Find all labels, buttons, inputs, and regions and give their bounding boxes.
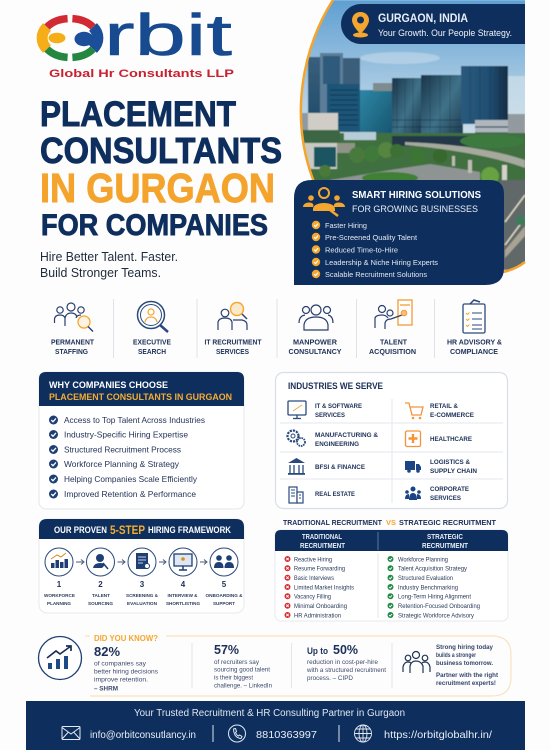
- step labels: SCREENING &: [126, 593, 159, 599]
- comparison heading: [283, 518, 496, 527]
- logo mark: [42, 19, 98, 57]
- tagline: Hire Better Talent. Faster.: [40, 249, 178, 264]
- industry: IT and software: [288, 401, 362, 419]
- service: talent acquisition: TALENT: [380, 340, 408, 346]
- step numbers: 5: [222, 580, 227, 589]
- strategic column: Talent Acquisition Strategy: [398, 566, 468, 573]
- table header: RECRUITMENT: [422, 543, 469, 550]
- panel header: [39, 372, 244, 406]
- footer email: [62, 726, 196, 741]
- industry: healthcare: HEALTHCARE: [430, 436, 472, 443]
- strategic column: Strategic Workforce Advisory: [398, 612, 475, 619]
- stat: up to 50 percent: with a structured recruitment: [306, 668, 386, 674]
- stat: 82 percent: of companies say: [94, 662, 146, 668]
- partner message: Strong hiring today: [436, 645, 494, 651]
- panel: why companies choose: [39, 372, 244, 509]
- step labels: PLANNING: [47, 601, 71, 607]
- stat: up to 50 percent: Up to: [307, 646, 328, 656]
- traditional column: Basic Interviews: [294, 575, 334, 582]
- logo: [42, 3, 234, 80]
- footer website: https://orbitglobalhr.in/: [384, 729, 492, 741]
- service: executive search: EXECUTIVE: [133, 340, 171, 346]
- industry: logistics: LOGISTICS &: [430, 459, 470, 466]
- framework header: HIRING FRAMEWORK: [148, 525, 231, 535]
- panel: smart hiring solutions: [294, 180, 504, 285]
- step labels: ONBOARDING &: [206, 593, 243, 599]
- icon: growth chart: [38, 636, 82, 680]
- reasons list: Workforce Planning & Strategy: [64, 459, 180, 469]
- table header: STRATEGIC: [427, 534, 463, 541]
- comparison heading: VS: [386, 518, 396, 527]
- step labels: [44, 593, 243, 607]
- partner message: recruitment experts!: [436, 681, 496, 687]
- traditional column: Resume Forwarding: [294, 566, 346, 573]
- stat: 82 percent: 82%: [94, 644, 120, 659]
- stat: 57 percent: of recruiters say: [214, 660, 259, 666]
- stat: 82 percent: – SHRM: [94, 686, 118, 692]
- industry: logistics: [405, 459, 477, 475]
- footer tagline: Your Trusted Recruitment & HR Consulting Partner in Gurgaon: [134, 708, 405, 719]
- service: IT recruitment services: IT RECRUITMENT: [204, 340, 262, 346]
- stat: 57 percent: sourcing good talent: [214, 668, 270, 674]
- icon: people: [403, 652, 430, 673]
- location slogan: Your Growth. Our People Strategy.: [378, 28, 512, 39]
- comparison heading: TRADITIONAL RECRUITMENT: [283, 518, 382, 527]
- service: permanent staffing: [51, 303, 95, 356]
- step numbers: [57, 580, 227, 589]
- service: manpower consultancy: MANPOWER: [293, 340, 337, 346]
- framework header: [39, 519, 244, 539]
- traditional column: HR Administration: [294, 612, 342, 619]
- stat: 57 percent: 57%: [214, 642, 239, 657]
- traditional column: Minimal Onboarding: [294, 603, 348, 610]
- partner message: [436, 645, 498, 687]
- comparison table: [275, 530, 508, 621]
- step icon: onboarding: [214, 555, 234, 568]
- panel subheading: FOR GROWING BUSINESSES: [352, 204, 478, 215]
- strategic column: Workforce Planning: [398, 556, 449, 563]
- industry: retail: RETAIL &: [430, 403, 458, 410]
- footer phone: 8810363997: [256, 729, 317, 741]
- step numbers: 4: [181, 580, 186, 589]
- industry: retail: [405, 403, 474, 419]
- panel: 5-step hiring framework: [39, 519, 244, 613]
- did you know strip: [38, 634, 511, 696]
- step labels: TALENT: [92, 593, 110, 599]
- service: IT recruitment services: SERVICES: [216, 349, 249, 356]
- partner message: Partner with the right: [436, 673, 498, 679]
- icon: team with magnifier: [303, 188, 345, 216]
- strategic column: [388, 556, 481, 619]
- benefits list: Leadership & Niche Hiring Experts: [325, 258, 438, 267]
- footer website: [354, 725, 492, 742]
- strategic column: Structured Evaluation: [398, 575, 454, 582]
- stat: 57 percent: [214, 642, 272, 690]
- reasons list: Industry-Specific Hiring Expertise: [64, 430, 188, 440]
- footer: [26, 701, 525, 750]
- service: executive search: [133, 302, 171, 356]
- service: permanent staffing: STAFFING: [55, 349, 89, 356]
- industry: manufacturing: MANUFACTURING &: [315, 432, 378, 439]
- comparison heading: STRATEGIC RECRUITMENT: [399, 518, 496, 527]
- reasons list: Structured Recruitment Process: [64, 444, 181, 454]
- step numbers: 3: [140, 580, 145, 589]
- stat: 57 percent: challenge. – LinkedIn: [214, 684, 272, 690]
- industry: manufacturing: ENGINEERING: [315, 441, 359, 448]
- stat: up to 50 percent: reduction in cost-per-hire: [307, 660, 379, 666]
- step labels: SOURCING: [88, 601, 113, 607]
- panel: industries we serve: [276, 372, 508, 508]
- reasons list: [49, 415, 205, 499]
- service: executive search: SEARCH: [138, 349, 166, 356]
- strategic column: Industry Benchmarking: [398, 584, 459, 591]
- step icon: talent sourcing: [93, 554, 108, 569]
- service: permanent staffing: PERMANENT: [51, 340, 95, 346]
- framework header: OUR PROVEN: [54, 525, 107, 535]
- service: HR advisory and compliance: [447, 300, 502, 356]
- service: IT recruitment services: [204, 302, 262, 356]
- location banner: [341, 4, 525, 44]
- step icon: workforce planning: [51, 553, 68, 568]
- step circles and arrows: [45, 548, 238, 576]
- logo tagline: Global Hr Consultants LLP: [49, 68, 234, 80]
- step numbers: 2: [98, 580, 103, 589]
- industry: corporate services: SERVICES: [430, 495, 461, 502]
- table header: RECRUITMENT: [300, 543, 346, 550]
- tagline: Build Stronger Teams.: [40, 265, 161, 280]
- table header: TRADITIONAL: [302, 534, 343, 541]
- industry: IT and software: IT & SOFTWARE: [315, 403, 362, 410]
- service: manpower consultancy: [288, 305, 342, 356]
- industry: retail: E-COMMERCE: [430, 412, 474, 419]
- industry: logistics: SUPPLY CHAIN: [430, 468, 477, 475]
- traditional column: Limited Market Insights: [294, 584, 354, 591]
- partner message: builds a stronger: [436, 653, 477, 659]
- stat: 82 percent: improve retention.: [94, 678, 148, 684]
- industry: real estate: [289, 487, 355, 503]
- did you know label: DID YOU KNOW?: [94, 634, 158, 643]
- reasons list: Access to Top Talent Across Industries: [64, 415, 205, 425]
- step labels: SUPPORT: [213, 601, 235, 607]
- step labels: WORKFORCE: [44, 593, 76, 599]
- reasons list: Improved Retention & Performance: [64, 489, 196, 499]
- stat: up to 50 percent: [306, 642, 386, 682]
- panel header: WHY COMPANIES CHOOSE: [49, 380, 168, 391]
- step icon: interview: [174, 554, 192, 570]
- orange arc border: [301, 0, 333, 182]
- service: talent acquisition: ACQUISITION: [369, 349, 416, 356]
- framework header: 5-STEP: [110, 525, 145, 537]
- industry: healthcare: [406, 431, 472, 446]
- service: talent acquisition: [369, 300, 416, 356]
- benefits list: Faster Hiring: [325, 221, 367, 230]
- industry: BFSI: BFSI & FINANCE: [315, 464, 365, 471]
- industry: corporate services: CORPORATE: [430, 486, 469, 493]
- stat: up to 50 percent: process. – CIPD: [307, 676, 354, 682]
- title: [40, 95, 282, 242]
- footer email: info@orbitconsutlancy.in: [90, 729, 196, 741]
- industry: BFSI: [288, 458, 365, 475]
- panel heading: SMART HIRING SOLUTIONS: [352, 190, 481, 201]
- footer phone: [228, 725, 317, 742]
- reasons list: Helping Companies Scale Efficiently: [64, 474, 198, 484]
- step labels: EVALUATION: [127, 601, 158, 607]
- benefits list: Scalable Recruitment Solutions: [325, 270, 427, 279]
- industry: real estate: REAL ESTATE: [315, 491, 355, 498]
- benefits list: [312, 221, 438, 279]
- service: HR advisory and compliance: HR ADVISORY &: [447, 340, 502, 346]
- stat: 57 percent: is their biggest: [214, 676, 253, 682]
- tagline: [40, 249, 178, 280]
- services row: [51, 299, 502, 358]
- stat: up to 50 percent: 50%: [333, 642, 358, 657]
- step labels: SHORTLISTING: [166, 601, 200, 607]
- industries heading: INDUSTRIES WE SERVE: [288, 381, 383, 392]
- traditional column: Vacancy Filling: [294, 594, 331, 601]
- strategic column: Retention-Focused Onboarding: [398, 603, 481, 610]
- strategic column: Long-Term Hiring Alignment: [398, 594, 471, 601]
- hero photo: Gurgaon office towers: [290, 0, 530, 272]
- title: CONSULTANTS: [40, 130, 282, 171]
- stat: 82 percent: [94, 644, 158, 692]
- benefits list: Reduced Time-to-Hire: [325, 246, 398, 254]
- title: IN GURGAON: [40, 165, 275, 211]
- stat: 82 percent: better hiring decisions: [94, 670, 158, 676]
- industry: corporate services: [405, 486, 469, 502]
- title: FOR COMPANIES: [41, 209, 268, 242]
- step numbers: 1: [57, 580, 62, 589]
- step icon: screening: [136, 553, 150, 569]
- table header: [275, 530, 508, 551]
- icon: location pin: [352, 12, 369, 38]
- industry: IT and software: SERVICES: [315, 412, 345, 419]
- title: PLACEMENT: [40, 95, 236, 134]
- step labels: INTERVIEW &: [168, 593, 198, 599]
- traditional column: [284, 556, 354, 619]
- service: manpower consultancy: CONSULTANCY: [288, 349, 342, 356]
- traditional column: Reactive Hiring: [294, 556, 333, 563]
- benefits list: Pre-Screened Quality Talent: [325, 233, 418, 242]
- industry: manufacturing: [288, 430, 378, 448]
- location heading: GURGAON, INDIA: [378, 13, 468, 25]
- service: HR advisory and compliance: COMPLIANCE: [450, 349, 498, 356]
- panel header: PLACEMENT CONSULTANTS IN GURGAON: [49, 392, 232, 403]
- partner message: business tomorrow.: [436, 661, 493, 667]
- logo wordmark: rbit: [104, 3, 232, 68]
